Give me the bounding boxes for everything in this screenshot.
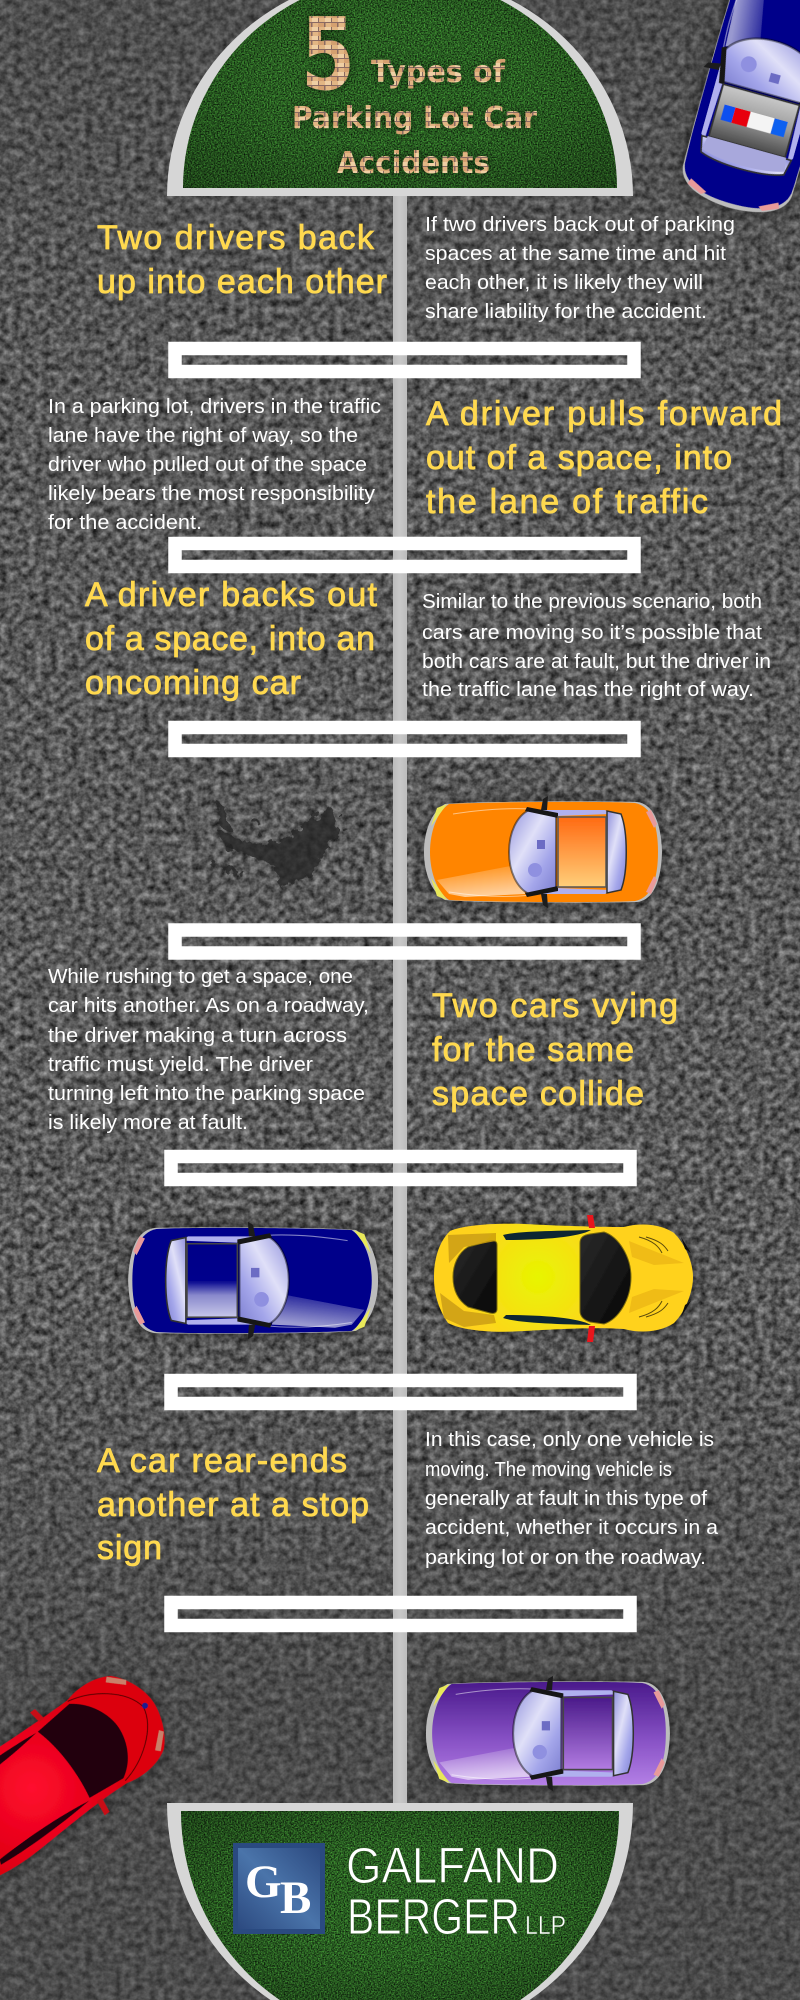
section 1 text: If two drivers back out of parking bbox=[425, 214, 735, 236]
section 4 heading: for the same bbox=[432, 1031, 634, 1069]
firm name: GALFAND bbox=[346, 1837, 559, 1894]
section 5 text bbox=[425, 1429, 719, 1569]
section 5 heading: another at a stop bbox=[97, 1486, 369, 1524]
section 4 heading: space collide bbox=[432, 1075, 644, 1113]
logo mark bbox=[233, 1843, 325, 1934]
icon: orange car bbox=[424, 796, 662, 908]
firm name: LLP bbox=[525, 1910, 566, 1940]
section 3 text: cars are moving so it’s possible that bbox=[422, 622, 762, 644]
section 1 heading bbox=[97, 219, 387, 301]
section 5 heading: A car rear-ends bbox=[97, 1442, 347, 1480]
section 4 heading bbox=[432, 987, 678, 1113]
section 4 text bbox=[48, 966, 369, 1134]
section 4 text: While rushing to get a space, one bbox=[48, 966, 353, 988]
section 3 heading bbox=[85, 576, 378, 702]
section 5 heading: sign bbox=[97, 1529, 162, 1567]
section 2 heading: out of a space, into bbox=[426, 439, 732, 477]
section 3 text bbox=[422, 591, 771, 701]
section 1 heading: Two drivers back bbox=[97, 219, 375, 257]
oil stain bbox=[209, 800, 347, 888]
icon: police car bbox=[669, 0, 800, 225]
section 1 heading: up into each other bbox=[97, 263, 387, 301]
title panel: grass island bbox=[167, 0, 633, 196]
section 3 text: the traffic lane has the right of way. bbox=[422, 679, 754, 701]
section 2 text: lane have the right of way, so the bbox=[48, 425, 358, 447]
section 1 text: spaces at the same time and hit bbox=[425, 243, 726, 265]
section 5 heading bbox=[97, 1442, 369, 1567]
icon: purple car bbox=[426, 1676, 670, 1791]
section 3 text: both cars are at fault, but the driver in bbox=[422, 651, 771, 673]
firm name bbox=[346, 1837, 566, 1945]
logo mark: B bbox=[280, 1872, 311, 1924]
section 2 heading: A driver pulls forward bbox=[426, 395, 782, 433]
section 1 text: share liability for the accident. bbox=[425, 301, 707, 323]
section 4 text: turning left into the parking space bbox=[48, 1083, 365, 1105]
section 5 text: accident, whether it occurs in a bbox=[425, 1517, 719, 1539]
icon: yellow sports car bbox=[434, 1215, 693, 1342]
section 3 heading: of a space, into an bbox=[85, 620, 375, 658]
section 4 text: car hits another. As on a roadway, bbox=[48, 995, 369, 1017]
section 5 text: parking lot or on the roadway. bbox=[425, 1547, 706, 1569]
section 4 text: traffic must yield. The driver bbox=[48, 1054, 313, 1076]
section 2 text: driver who pulled out of the space bbox=[48, 454, 367, 476]
title text: Accidents bbox=[337, 146, 490, 181]
title text bbox=[292, 0, 537, 181]
section 2 text bbox=[48, 396, 381, 534]
section 3 heading: oncoming car bbox=[85, 664, 301, 702]
section 5 text: In this case, only one vehicle is bbox=[425, 1429, 714, 1451]
parking centre line bbox=[393, 190, 407, 1810]
section 4 text: the driver making a turn across bbox=[48, 1025, 347, 1047]
section 1 text: each other, it is likely they will bbox=[425, 272, 703, 294]
section 2 text: for the accident. bbox=[48, 512, 202, 534]
section 2 text: likely bears the most responsibility bbox=[48, 483, 375, 505]
icon: red sports car bbox=[0, 1650, 190, 1905]
section 4 heading: Two cars vying bbox=[432, 987, 678, 1025]
title text: Types of bbox=[371, 55, 506, 90]
section 2 heading bbox=[426, 395, 782, 521]
firm name: BERGER bbox=[347, 1888, 520, 1945]
section 5 text: moving. The moving vehicle is bbox=[425, 1459, 672, 1481]
parking stall marker bars bbox=[171, 348, 634, 1626]
section 3 text: Similar to the previous scenario, both bbox=[422, 591, 762, 613]
section 5 text: generally at fault in this type of bbox=[425, 1488, 707, 1510]
section 4 text: is likely more at fault. bbox=[48, 1112, 248, 1134]
logo mark: G bbox=[245, 1856, 282, 1908]
section 3 heading: A driver backs out bbox=[85, 576, 378, 614]
section 2 heading: the lane of traffic bbox=[426, 483, 708, 521]
footer panel: grass island with logo bbox=[167, 1803, 633, 2000]
title text: Parking Lot Car bbox=[292, 101, 537, 136]
icon: blue car bbox=[128, 1222, 378, 1339]
section 2 text: In a parking lot, drivers in the traffic bbox=[48, 396, 381, 418]
section 1 text bbox=[425, 214, 735, 323]
